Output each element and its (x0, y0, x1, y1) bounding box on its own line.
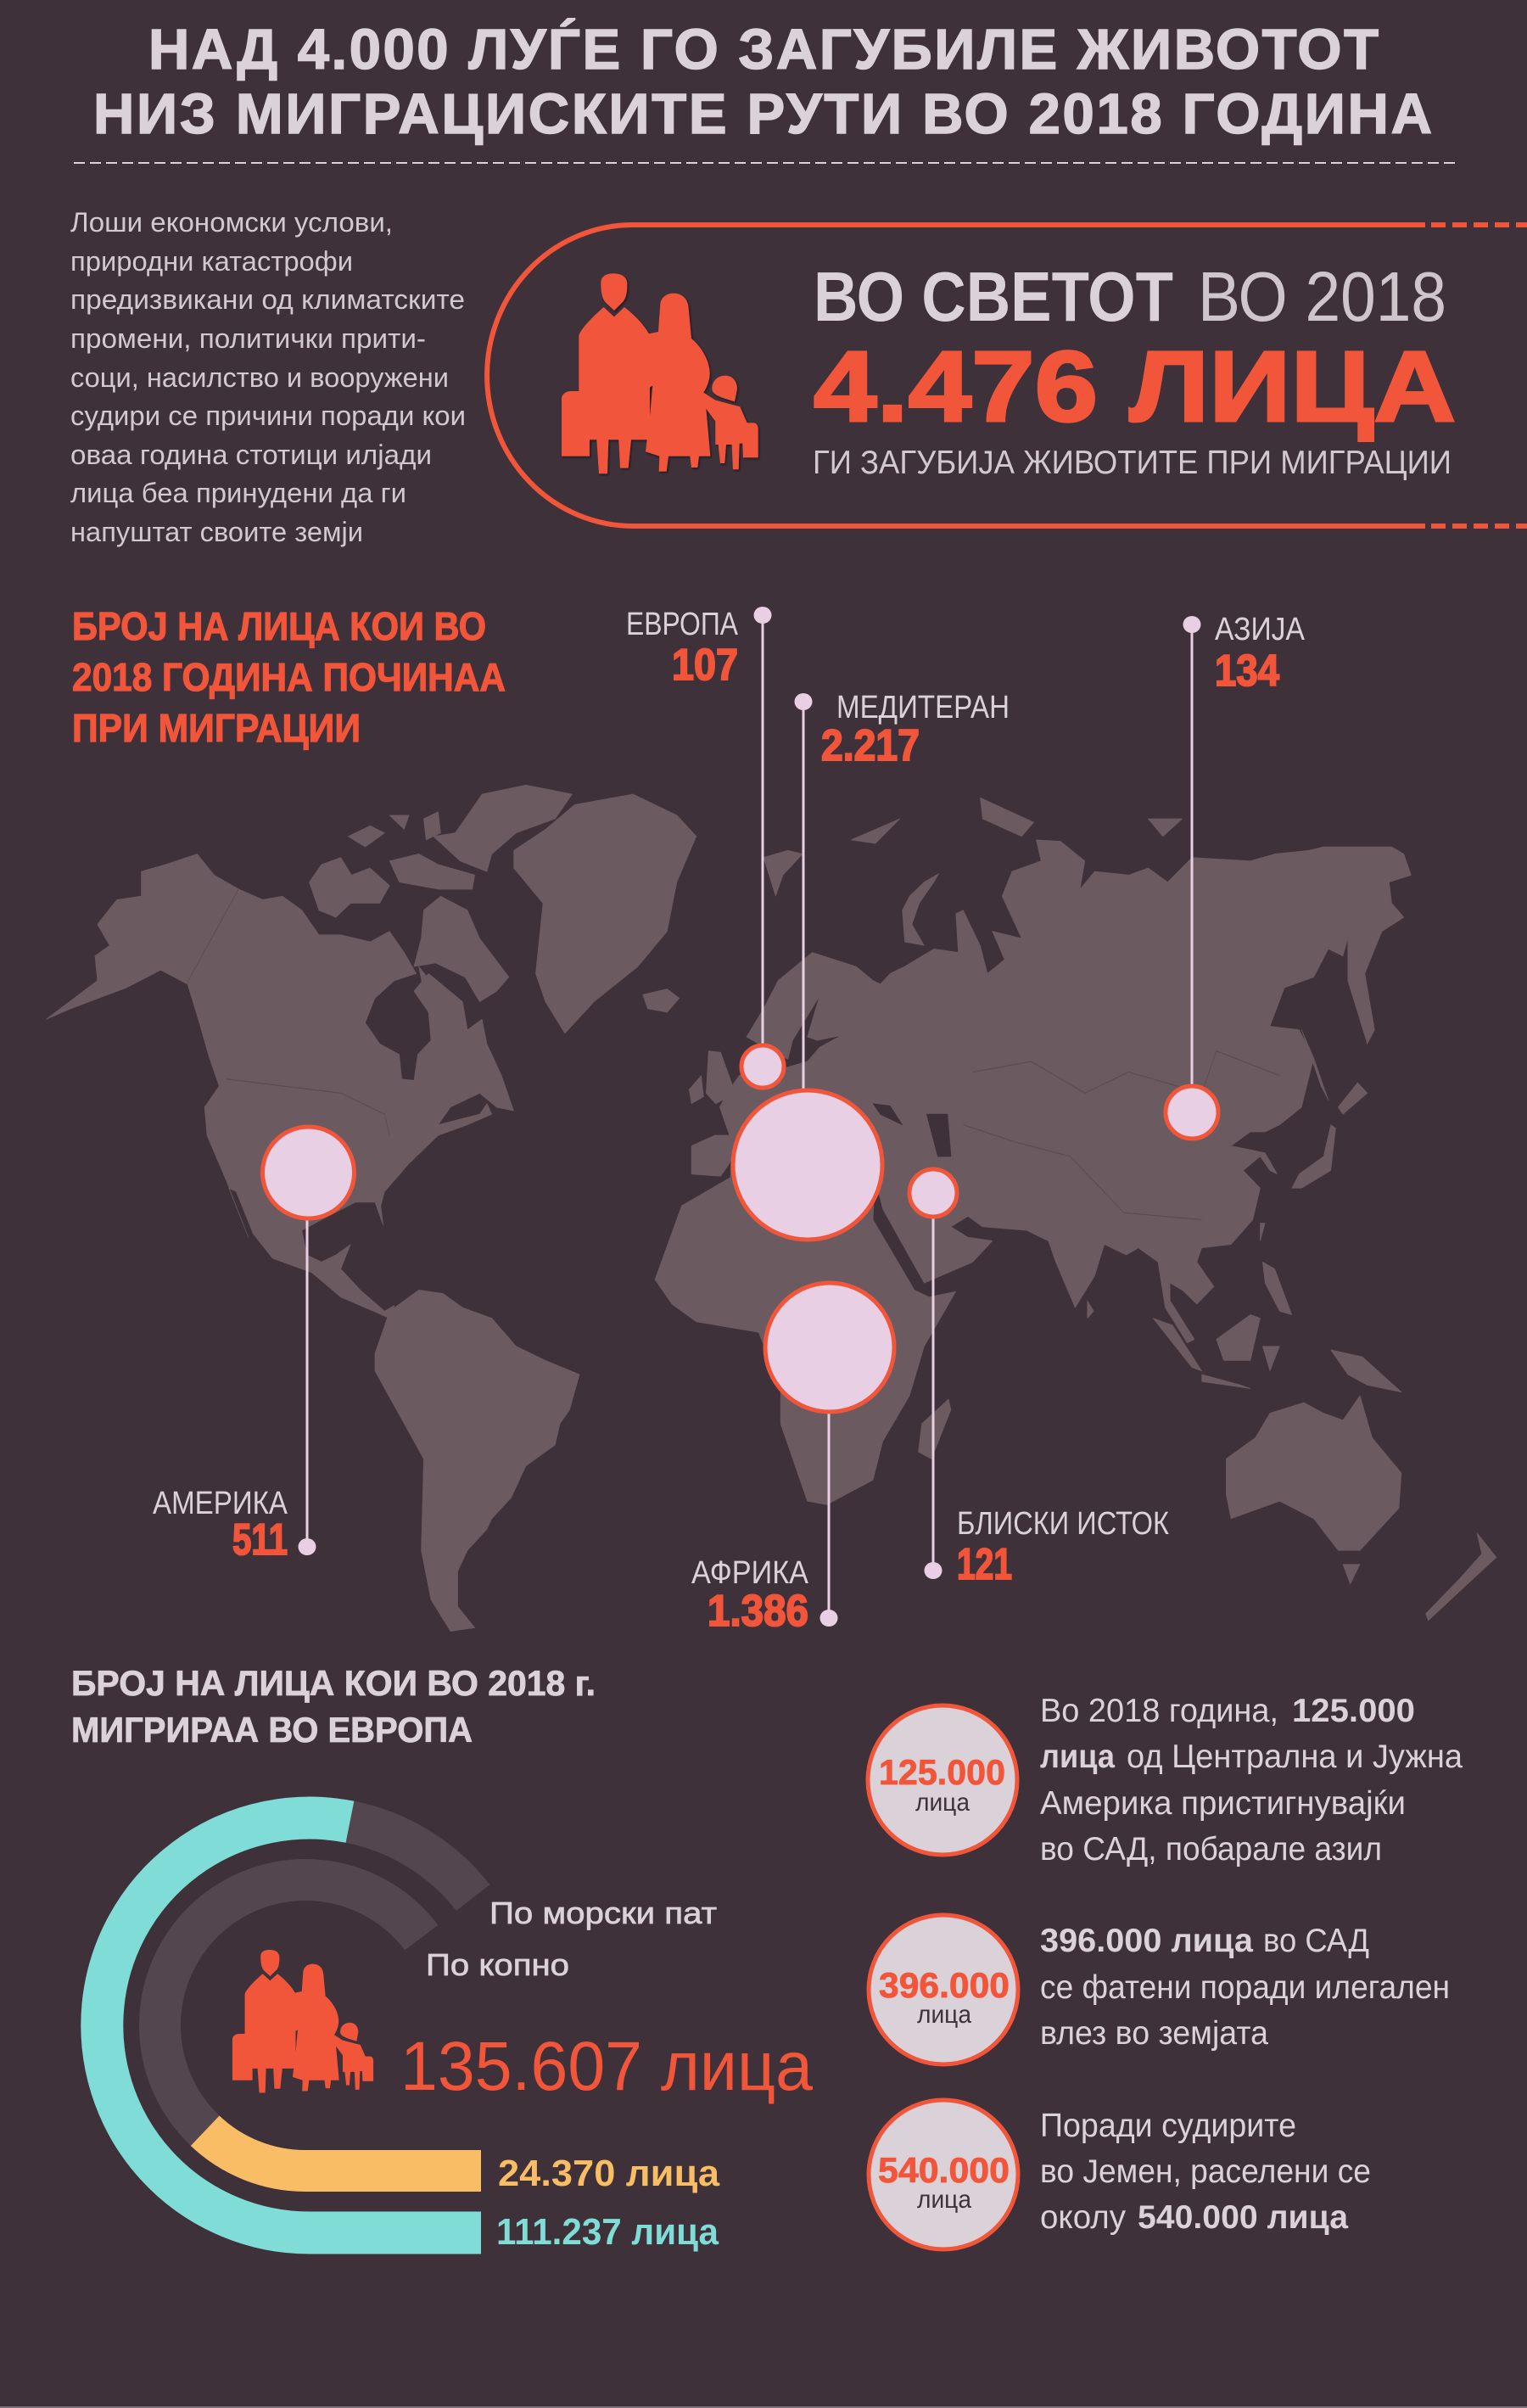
intro paragraph (70, 207, 466, 547)
text: asylum in USA: во САД, побарале азил (1040, 1831, 1382, 1868)
panel heading: ВО СВЕТОТ (814, 257, 1173, 336)
badge: 396.000: 396.000 (879, 1965, 1010, 2005)
badge: 540.000: лица (917, 2186, 971, 2214)
text: asylum in USA: 125.000 (1292, 1693, 1415, 1729)
text: asylum in USA (1040, 1693, 1463, 1868)
intro paragraph: судири се причини поради кои (70, 400, 466, 431)
map marker: Азија (1166, 612, 1306, 1139)
text: asylum in USA: Америка пристигнувајќи (1040, 1785, 1406, 1822)
map marker: Европа: 107 (672, 641, 738, 690)
intro paragraph: напуштат своите земји (70, 517, 363, 547)
text: asylum in USA: Во 2018 година, (1040, 1693, 1278, 1729)
map marker: Медитеран: МЕДИТЕРАН (836, 690, 1010, 725)
map marker: Европа: ЕВРОПА (626, 607, 739, 642)
panel subheading: ГИ ЗАГУБИЈА ЖИВОТИТЕ ПРИ МИГРАЦИИ (813, 445, 1451, 481)
total number: 135.607 лица (400, 2028, 813, 2105)
text: Yemen displaced: во Јемен, раселени се (1040, 2153, 1371, 2190)
text: illegal entry: влез во земјата (1040, 2015, 1268, 2052)
map marker: Европа (626, 607, 784, 1088)
map marker: Азија: 134 (1215, 647, 1279, 696)
map marker: Блиски Исток (909, 1169, 1169, 1589)
world map (47, 785, 1496, 1632)
title: НИЗ МИГРАЦИСКИТЕ РУТИ ВО 2018 ГОДИНА (93, 82, 1432, 146)
value: land: 24.370 лица (498, 2153, 720, 2194)
map marker: Африка: АФРИКА (691, 1555, 809, 1591)
text: illegal entry: 396.000 лица (1040, 1923, 1253, 1959)
heading: migrants to Europe: БРОЈ НА ЛИЦА КОИ ВО 2018 г. (71, 1663, 596, 1703)
map marker: Америка (153, 1127, 355, 1565)
intro paragraph: лица беа принудени да ги (70, 478, 406, 508)
badge: 125.000 (868, 1705, 1017, 1855)
intro paragraph: природни катастрофи (70, 246, 353, 277)
text: illegal entry: се фатени поради илегален (1040, 1969, 1450, 2006)
panel: world total (487, 225, 1527, 526)
badge: 125.000: 125.000 (879, 1752, 1005, 1792)
map marker: Америка: 511 (232, 1515, 288, 1565)
map marker: Медитеран: 2.217 (821, 721, 920, 770)
text: asylum in USA: лица (1040, 1739, 1115, 1775)
big number: 4.476 ЛИЦА (814, 331, 1456, 443)
heading: deaths by region (72, 604, 506, 750)
label: sea route: По морски пат (489, 1896, 717, 1930)
map marker: Африка (691, 1283, 894, 1636)
icon: family small (232, 1950, 373, 2092)
icon: family (562, 273, 758, 473)
map marker: Блиски Исток: БЛИСКИ ИСТОК (957, 1506, 1169, 1542)
intro paragraph: промени, политички прити- (70, 323, 426, 354)
heading: deaths by region: ПРИ МИГРАЦИИ (72, 706, 361, 750)
badge: 396.000: лица (917, 2001, 971, 2029)
heading: migrants to Europe (71, 1663, 596, 1750)
panel heading year: ВО 2018 (1198, 257, 1446, 336)
title: НАД 4.000 ЛУЃЕ ГО ЗАГУБИЛЕ ЖИВОТОТ (148, 18, 1379, 81)
intro paragraph: Лоши економски услови, (70, 207, 393, 238)
text: illegal entry (1040, 1923, 1450, 2052)
map marker: Медитеран (733, 690, 1010, 1240)
text: Yemen displaced: 540.000 лица (1138, 2199, 1348, 2236)
radial chart: migration routes (102, 1818, 481, 2233)
text: illegal entry: во САД (1263, 1923, 1369, 1959)
map marker: Америка: АМЕРИКА (153, 1486, 288, 1521)
intro paragraph: оваа година стотици илјади (70, 440, 432, 470)
value: sea: 111.237 лица (496, 2211, 719, 2253)
badge: 125.000: лица (915, 1789, 970, 1817)
badge: 540.000: 540.000 (878, 2150, 1010, 2190)
text: Yemen displaced: Поради судирите (1040, 2108, 1296, 2144)
label: land route: По копно (426, 1947, 569, 1982)
heading: deaths by region: БРОЈ НА ЛИЦА КОИ ВО (72, 604, 486, 648)
badge: 540.000 (869, 2100, 1018, 2249)
map marker: Азија: АЗИЈА (1215, 612, 1306, 647)
intro paragraph: предизвикани од климатските (70, 284, 465, 315)
text: Yemen displaced: околу (1040, 2199, 1126, 2236)
badge: 396.000 (869, 1915, 1018, 2064)
map marker: Блиски Исток: 121 (957, 1540, 1012, 1589)
text: Yemen displaced (1040, 2108, 1371, 2236)
map marker: Африка: 1.386 (708, 1587, 808, 1636)
title (93, 18, 1432, 146)
heading: deaths by region: 2018 ГОДИНА ПОЧИНАА (72, 655, 506, 699)
text: asylum in USA: од Централна и Јужна (1127, 1739, 1463, 1775)
heading: migrants to Europe: МИГРИРАА ВО ЕВРОПА (71, 1710, 473, 1750)
intro paragraph: соци, насилство и вооружени (70, 362, 449, 393)
